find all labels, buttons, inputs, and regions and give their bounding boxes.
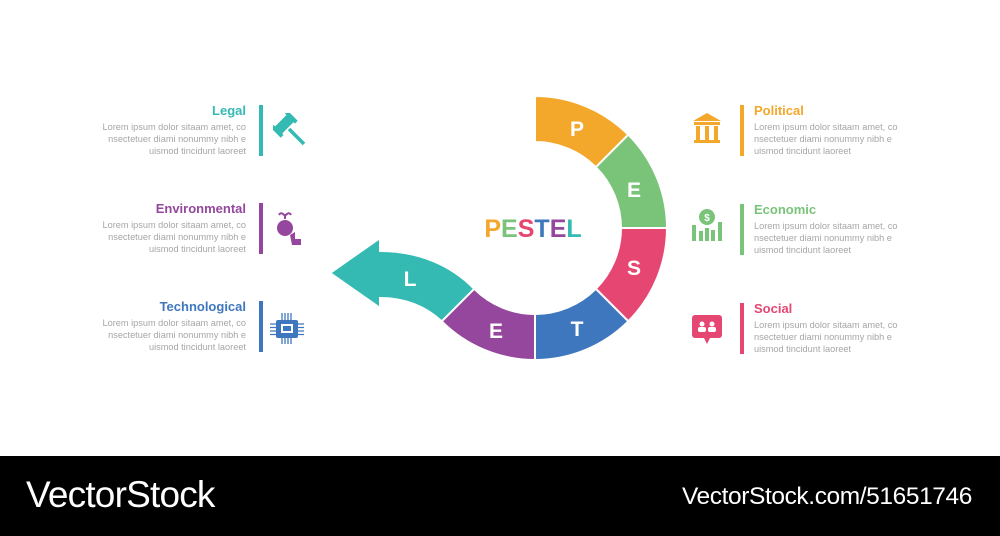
item: Political: Political [754, 103, 804, 118]
item: Economic: Lorem ipsum dolor sitaam amet, co nsectetuer diami nonummy nibh e uismod tincidunt laoreet [754, 221, 897, 255]
icon: globe hand [277, 212, 301, 245]
item: Technological: Lorem ipsum dolor sitaam amet, co nsectetuer diami nonummy nibh e uismod tincidunt laoreet [103, 318, 246, 352]
segment E environmental: E [489, 320, 503, 343]
item: Technological [103, 299, 304, 352]
item: Social: Lorem ipsum dolor sitaam amet, co nsectetuer diami nonummy nibh e uismod tincidunt laoreet [754, 320, 897, 354]
icon: chip [270, 313, 304, 344]
segment S: S [627, 257, 641, 280]
item: Economic: Economic [754, 202, 816, 217]
item: Environmental: Lorem ipsum dolor sitaam amet, co nsectetuer diami nonummy nibh e uismod tincidunt laoreet [103, 220, 246, 254]
icon: chart coin [692, 209, 722, 241]
footer url: VectorStock.com/51651746 [682, 483, 972, 510]
segment E economic: E [627, 179, 641, 202]
item: Legal: Lorem ipsum dolor sitaam amet, co nsectetuer diami nonummy nibh e uismod tincidunt laoreet [103, 122, 246, 156]
segment E environmental [442, 289, 535, 360]
segment P [535, 96, 628, 167]
arrow L [330, 238, 474, 321]
item: Legal: Legal [212, 103, 246, 118]
item: Social: Social [754, 301, 792, 316]
footer logo: VectorStock [26, 474, 215, 515]
icon: columns [693, 113, 721, 143]
item: Social [692, 301, 898, 354]
center title PESTEL: PESTEL [484, 215, 582, 243]
item: Economic [692, 202, 898, 255]
icon: gavel [273, 113, 306, 146]
footer bar [0, 456, 1000, 536]
segment T [535, 289, 628, 360]
item: Political: Lorem ipsum dolor sitaam amet, co nsectetuer diami nonummy nibh e uismod tincidunt laoreet [754, 122, 897, 156]
segment S [596, 228, 667, 321]
item: Technological: Technological [160, 299, 246, 314]
segment T: T [571, 318, 584, 341]
segment P: P [570, 118, 584, 141]
item: Environmental: Environmental [156, 201, 246, 216]
icon: chat people [692, 315, 722, 344]
item: Legal [103, 103, 306, 156]
item: Political [693, 103, 898, 156]
arrow L: L [404, 268, 417, 291]
item: Environmental [103, 201, 301, 254]
icon: chart coin: $ [704, 213, 710, 224]
segment E economic [596, 135, 667, 228]
